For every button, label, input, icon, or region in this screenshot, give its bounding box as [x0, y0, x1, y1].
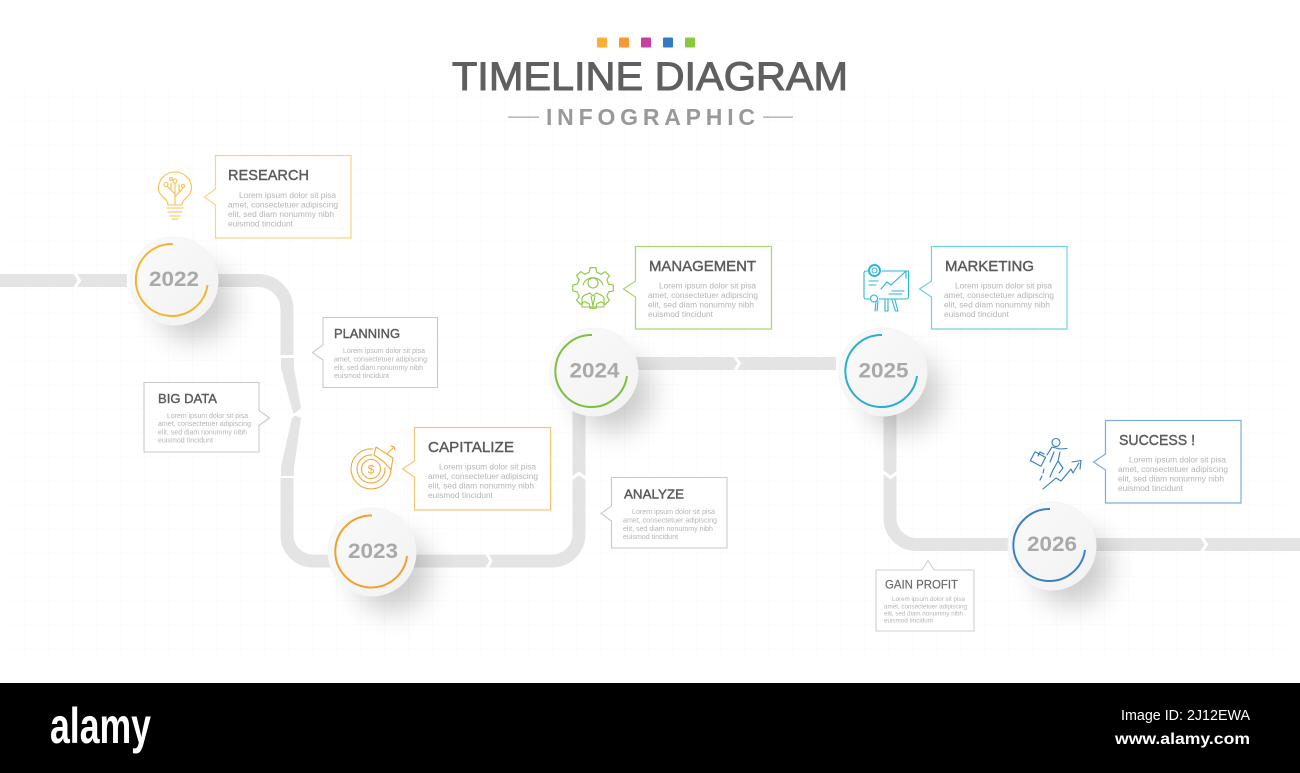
text: big data: euismod tincidunt — [158, 438, 213, 444]
heading: management: MANAGEMENT — [649, 258, 756, 275]
text: gain profit: euismod tincidunt — [884, 618, 933, 624]
text: planning — [334, 348, 427, 380]
icon: running businessman — [1030, 438, 1081, 489]
text: research: elit, sed diam nonummy nibh — [228, 210, 334, 219]
panel: marketing — [920, 246, 1067, 329]
text: gain profit: Lorem ipsum dolor sit pisa — [892, 597, 966, 603]
subtitle: INFOGRAPHIC — [546, 104, 755, 130]
text: big data: amet, consectetuer adipiscing — [158, 421, 251, 428]
panel: analyze — [601, 478, 727, 548]
heading: marketing: MARKETING — [945, 258, 1034, 275]
panel: big data — [144, 382, 270, 452]
heading: capitalize: CAPITALIZE — [428, 439, 514, 456]
text: success: Lorem ipsum dolor sit pisa — [1129, 456, 1227, 464]
panel: management — [624, 246, 772, 329]
text: marketing: amet, consectetuer adipiscing — [944, 291, 1054, 300]
panel: gain profit — [876, 560, 974, 631]
milestone 2023 — [328, 508, 430, 611]
footer logo: alamy — [50, 698, 151, 754]
text: analyze: elit, sed diam nonummy nibh — [623, 526, 713, 533]
text: success: amet, consectetuer adipiscing — [1118, 465, 1228, 474]
text: research: euismod tincidunt — [228, 220, 294, 228]
image id: Image ID: 2J12EWA — [1121, 707, 1250, 724]
title: TIMELINE DIAGRAM — [452, 55, 848, 99]
timeline road — [0, 272, 1300, 570]
text: management: elit, sed diam nonummy nibh — [648, 300, 754, 310]
text: capitalize: elit, sed diam nonummy nibh — [428, 482, 534, 490]
text: research — [228, 191, 338, 228]
text: planning: elit, sed diam nonummy nibh — [334, 365, 423, 372]
text: analyze: amet, consectetuer adipiscing — [623, 518, 717, 524]
text: planning: euismod tincidunt — [334, 373, 389, 380]
text: analyze: euismod tincidunt — [623, 534, 678, 541]
icon: gear with person — [573, 268, 613, 308]
icon: presentation board — [864, 265, 908, 311]
text: success — [1118, 456, 1228, 493]
panel: capitalize — [402, 428, 550, 510]
text: marketing — [944, 282, 1054, 319]
text: capitalize: euismod tincidunt — [428, 491, 494, 500]
heading: gain profit: GAIN PROFIT — [885, 578, 959, 592]
text: research: Lorem ipsum dolor sit pisa — [239, 191, 337, 200]
panel: research — [204, 156, 351, 238]
text: big data: elit, sed diam nonummy nibh — [158, 430, 247, 436]
text: planning: amet, consectetuer adipiscing — [334, 356, 427, 364]
heading: big data: BIG DATA — [158, 391, 217, 406]
text: research: amet, consectetuer adipiscing — [228, 200, 338, 210]
panel: planning — [312, 318, 438, 388]
milestone 2022: 2022 — [149, 267, 199, 291]
colour dots — [597, 38, 695, 48]
text: marketing: elit, sed diam nonummy nibh — [944, 300, 1050, 310]
text: capitalize: amet, consectetuer adipiscing — [428, 472, 538, 481]
milestone 2024: 2024 — [570, 358, 620, 382]
text: management: amet, consectetuer adipiscing — [648, 291, 758, 300]
text: management: Lorem ipsum dolor sit pisa — [659, 282, 757, 290]
milestone 2023: 2023 — [348, 539, 398, 563]
icon: dollar target: $ — [368, 462, 375, 476]
milestone 2024 — [550, 328, 652, 431]
text: analyze: Lorem ipsum dolor sit pisa — [632, 509, 715, 516]
milestone 2025: 2025 — [858, 358, 909, 382]
footer bar — [0, 683, 1300, 773]
icon: light bulb — [158, 172, 192, 219]
heading: success: SUCCESS ! — [1119, 432, 1195, 449]
text: gain profit: amet, consectetuer adipiscing — [884, 604, 967, 610]
text: capitalize: Lorem ipsum dolor sit pisa — [439, 462, 537, 472]
text: management — [648, 282, 758, 319]
heading: research: RESEARCH — [228, 167, 309, 184]
heading: analyze: ANALYZE — [624, 486, 684, 502]
text: success: elit, sed diam nonummy nibh — [1118, 474, 1224, 484]
icon: dollar target — [351, 446, 395, 489]
text: gain profit: elit, sed diam nonummy nibh — [884, 612, 963, 618]
text: management: euismod tincidunt — [648, 310, 714, 319]
panel: success — [1094, 420, 1241, 503]
text: big data: Lorem ipsum dolor sit pisa — [167, 413, 248, 420]
milestone 2022 — [130, 237, 232, 340]
text: gain profit — [884, 597, 967, 624]
milestone 2026 — [1008, 502, 1110, 605]
milestone 2025 — [839, 328, 941, 431]
text: success: euismod tincidunt — [1118, 484, 1184, 493]
milestone 2026: 2026 — [1027, 532, 1077, 556]
text: planning: Lorem ipsum dolor sit pisa — [343, 348, 425, 355]
heading: planning: PLANNING — [334, 326, 400, 341]
website: www.alamy.com — [1114, 731, 1250, 748]
text: big data — [158, 413, 251, 444]
text: marketing: euismod tincidunt — [944, 310, 1010, 319]
text: capitalize — [428, 462, 538, 500]
text: marketing: Lorem ipsum dolor sit pisa — [955, 282, 1053, 290]
text: analyze — [623, 509, 717, 541]
